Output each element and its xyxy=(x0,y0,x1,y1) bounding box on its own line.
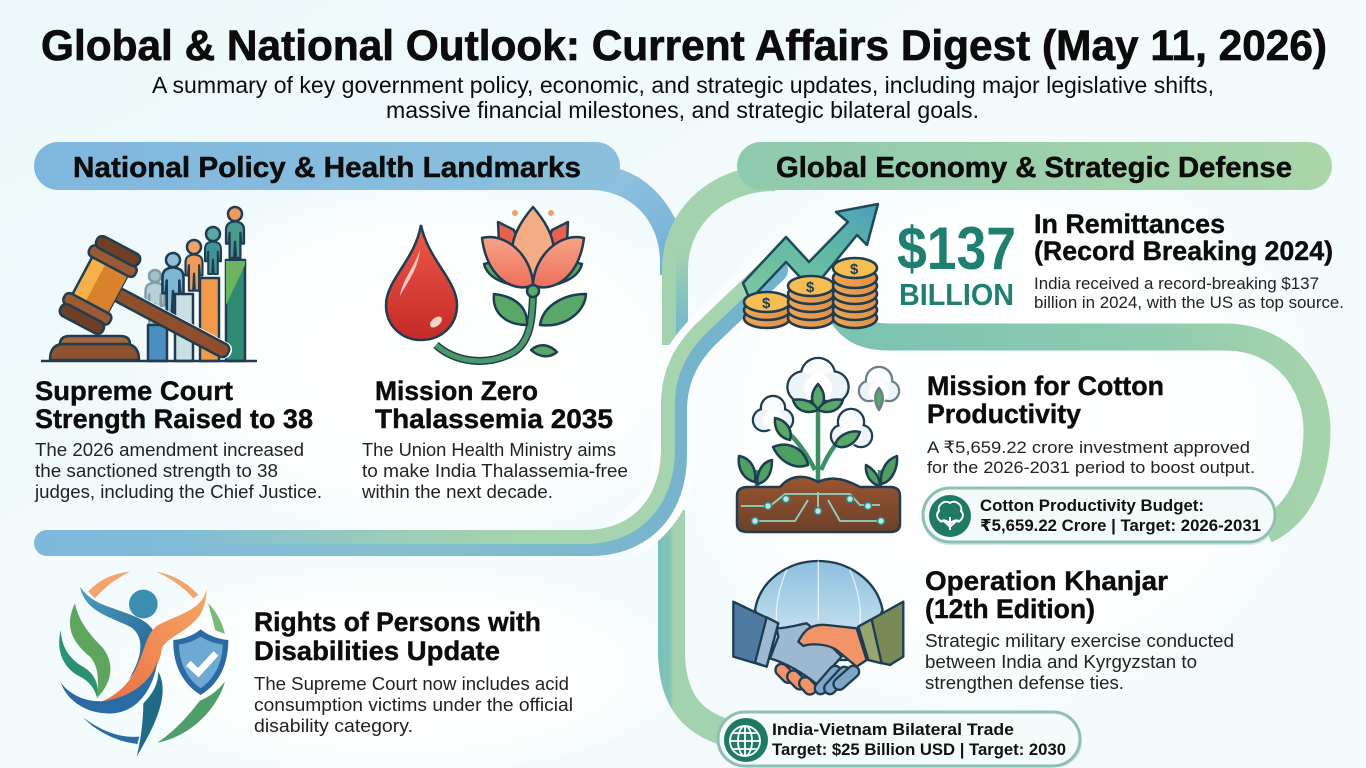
icon: lotus flower xyxy=(436,207,586,361)
text: supreme court body xyxy=(34,440,322,502)
heading: remittances: In Remittances xyxy=(1034,209,1225,239)
ribbon: national policy curve xyxy=(590,166,677,275)
heading: operation khanjar xyxy=(925,566,1168,624)
callout: cotton budget: Cotton Productivity Budget: xyxy=(980,497,1204,515)
heading: global economy: Global Economy & Strategic Defense xyxy=(776,152,1292,184)
callout: cotton budget xyxy=(923,488,1276,545)
heading: operation khanjar: (12th Edition) xyxy=(925,594,1095,624)
heading: cotton mission: Productivity xyxy=(927,399,1081,429)
icon: disability rights figure and shield xyxy=(59,572,228,757)
text: remittances body: billion in 2024, with the US as top source. xyxy=(1034,293,1344,312)
icon: cotton plant on circuit soil xyxy=(737,358,900,532)
icon: rising arrow xyxy=(743,204,878,300)
heading: mission zero xyxy=(375,376,613,434)
heading: remittances xyxy=(1034,209,1333,266)
text: supreme court body: The 2026 amendment increased xyxy=(35,440,304,460)
big number: $137 billion: $137 xyxy=(897,215,1016,282)
icon: cotton badge xyxy=(929,495,971,537)
text: cotton body: A ₹5,659.22 crore investment approved xyxy=(927,438,1250,457)
small boll xyxy=(859,367,899,402)
heading: supreme court: Strength Raised to 38 xyxy=(35,404,313,434)
heading: national policy: National Policy & Health Landmarks xyxy=(73,152,581,184)
heading: cotton mission xyxy=(927,371,1164,429)
callout: cotton budget: ₹5,659.22 Crore | Target: 2026-2031 xyxy=(980,517,1261,535)
icon: handshake before globe xyxy=(733,561,903,688)
icon: blood drop xyxy=(386,225,457,340)
icon: gavel and rising bars xyxy=(41,207,257,394)
heading: operation khanjar: Operation Khanjar xyxy=(925,566,1168,596)
heading: rights of persons: Rights of Persons with xyxy=(254,607,541,637)
big number: $137 billion: BILLION xyxy=(899,277,1014,312)
ribbon: cotton section curve xyxy=(838,308,1317,530)
text: mission zero body xyxy=(361,440,628,502)
text: operation body: strengthen defense ties. xyxy=(925,673,1124,693)
subtitle: massive financial milestones, and strategic bilateral goals. xyxy=(386,97,979,123)
text: rights body xyxy=(254,674,573,736)
title: Global & National Outlook: Current Affairs Digest (May 11, 2026) xyxy=(41,22,1327,70)
heading: cotton mission: Mission for Cotton xyxy=(927,371,1164,401)
callout: india-vietnam trade: Target: $25 Billion USD | Target: 2030 xyxy=(772,741,1066,759)
text: operation body: Strategic military exercise conducted xyxy=(925,631,1234,651)
icon: coin stacks xyxy=(744,258,877,328)
text: rights body: The Supreme Court now includes acid xyxy=(254,674,569,694)
heading: supreme court xyxy=(35,376,313,434)
heading: mission zero: Mission Zero xyxy=(375,376,538,406)
big number: $137 billion xyxy=(897,215,1016,312)
text: supreme court body: judges, including the Chief Justice. xyxy=(34,482,322,502)
heading: mission zero: Thalassemia 2035 xyxy=(375,404,613,434)
text: mission zero body: to make India Thalassemia-free xyxy=(362,461,628,481)
heading: global economy xyxy=(737,142,1332,190)
text: rights body: disability category. xyxy=(254,716,413,736)
text: remittances body xyxy=(1034,274,1344,312)
text: mission zero body: The Union Health Ministry aims xyxy=(362,440,616,460)
icon: coin stacks: $ xyxy=(762,295,771,312)
subtitle: A summary of key government policy, economic, and strategic updates, including major legislative shifts, xyxy=(152,72,1214,98)
icon: coin stacks: $ xyxy=(850,261,859,278)
text: remittances body: India received a record-breaking $137 xyxy=(1034,274,1319,293)
left boll xyxy=(753,396,793,431)
right boll xyxy=(831,409,872,447)
heading: rights of persons: Disabilities Update xyxy=(254,636,500,666)
icon: globe badge xyxy=(724,718,768,762)
icon: coin stacks: $ xyxy=(806,279,815,296)
callout: india-vietnam trade xyxy=(718,712,1082,767)
heading: remittances: (Record Breaking 2024) xyxy=(1034,236,1333,266)
text: rights body: consumption victims under the official xyxy=(254,695,573,715)
main boll xyxy=(788,358,848,402)
heading: national policy xyxy=(34,142,620,190)
text: operation body xyxy=(925,631,1234,693)
text: cotton body: for the 2026-2031 period to boost output. xyxy=(927,458,1255,477)
heading: rights of persons xyxy=(254,607,541,666)
text: operation body: between India and Kyrgyzstan to xyxy=(925,652,1197,672)
text: mission zero body: within the next decade. xyxy=(361,482,553,502)
text: supreme court body: the sanctioned strength to 38 xyxy=(35,461,278,481)
callout: india-vietnam trade: India-Vietnam Bilateral Trade xyxy=(772,721,1014,739)
subtitle xyxy=(152,72,1214,123)
ribbon: global economy curve xyxy=(675,178,775,345)
text: cotton body xyxy=(927,438,1255,477)
heading: supreme court: Supreme Court xyxy=(35,376,233,406)
ribbon: lower vertical connector xyxy=(672,510,728,733)
ribbon: S-curve with white halo xyxy=(47,264,775,543)
